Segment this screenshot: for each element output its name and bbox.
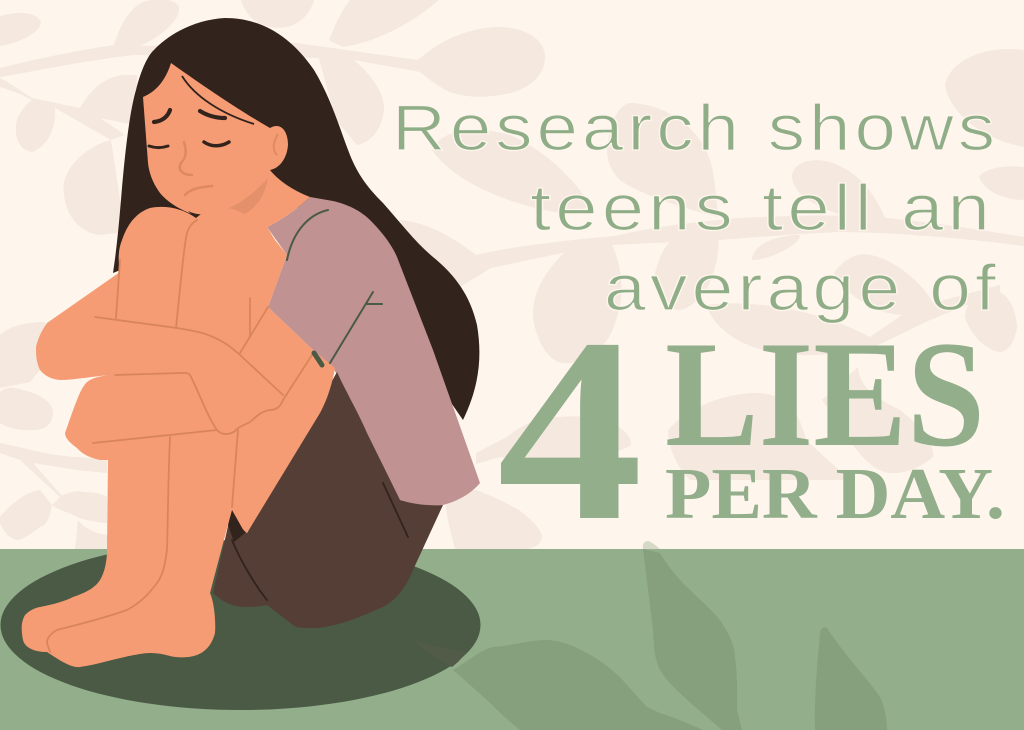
eyebrow right <box>200 111 225 118</box>
PER DAY.: PER DAY. <box>665 453 1005 534</box>
headline text <box>392 91 1000 324</box>
eye left <box>149 146 168 148</box>
line 2: teens tell an <box>530 171 994 244</box>
number 4: 4 <box>497 284 643 575</box>
forehead strand <box>182 76 254 124</box>
line 1: Research shows <box>392 91 999 164</box>
ear line <box>274 134 278 155</box>
dithered leaf overlap on ellipse <box>414 640 467 667</box>
eyebrow left <box>154 110 170 122</box>
line 3: average of <box>604 251 1000 324</box>
chin shadow <box>188 211 206 218</box>
hair <box>113 18 479 420</box>
shorts fold lines <box>228 483 408 600</box>
eye right <box>204 142 229 146</box>
shadow ellipse under figure <box>0 540 480 710</box>
shorts <box>213 372 443 628</box>
ear <box>270 126 288 170</box>
neck shadow <box>205 178 268 214</box>
shirt fold lines <box>287 210 382 365</box>
shirt <box>267 197 480 505</box>
floor leaf shadows <box>453 549 887 730</box>
panel: cream background <box>0 0 1024 550</box>
body: knees, arms, legs and feet <box>22 207 335 667</box>
LIES: LIES <box>665 310 985 478</box>
nose <box>180 142 192 175</box>
figure: sitting girl <box>22 18 480 667</box>
background leaf pattern <box>0 0 1024 549</box>
big statistic <box>497 284 1005 575</box>
floor leaf tip above floor line <box>643 541 660 549</box>
mouth <box>185 186 212 195</box>
knee and arm contour lines <box>47 220 312 652</box>
panel: green floor <box>0 549 1024 730</box>
face and neck <box>143 63 310 240</box>
